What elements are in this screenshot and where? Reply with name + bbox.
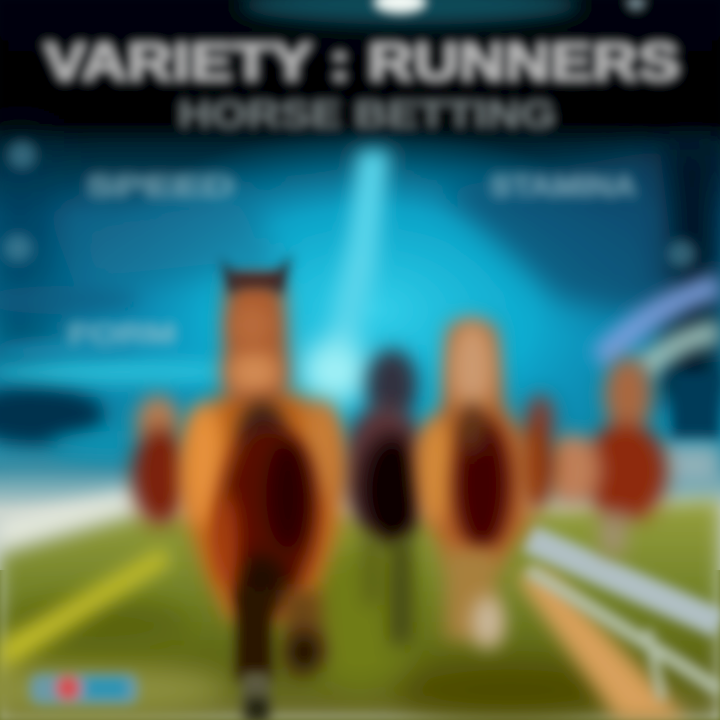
- horizon haze: [0, 490, 140, 548]
- title line 2: HORSE BETTING: [178, 94, 556, 136]
- central light beam: [299, 150, 390, 404]
- horse far left: [132, 395, 188, 525]
- title line 1: VARIETY : RUNNERS: [44, 32, 680, 92]
- label right upper: STAMINA: [490, 170, 636, 203]
- rainbow streak right: [600, 285, 720, 485]
- title: [44, 32, 680, 136]
- main horse chest: [238, 400, 286, 464]
- horse black centre: [341, 349, 429, 645]
- horse centre right: [416, 320, 530, 648]
- label left lower: FORM: [68, 318, 176, 349]
- white fence: [528, 538, 720, 700]
- moon at top of sky: [374, 0, 426, 13]
- main horse legs: [236, 590, 272, 680]
- horse far right small: [546, 357, 667, 555]
- logo badge bottom left: [30, 674, 138, 704]
- yellow track line: [0, 548, 172, 672]
- main horse shoulder highlight left: [184, 403, 224, 527]
- horse main foreground: [181, 254, 343, 720]
- small star top right: [627, 0, 645, 10]
- main horse head: [222, 278, 290, 405]
- main horse body: [181, 385, 343, 620]
- grass track: [0, 500, 720, 720]
- main horse ears: [220, 254, 292, 296]
- main horse muzzle highlight: [228, 350, 280, 394]
- main horse shoulder highlight right: [302, 400, 342, 500]
- faint sky text labels: [68, 170, 636, 349]
- orange track edge: [515, 572, 688, 720]
- label left upper: SPEED: [86, 170, 234, 203]
- horse mid right small: [515, 394, 555, 511]
- faint sky dots: [4, 141, 696, 268]
- base ground colour under blurred edges: [0, 570, 720, 720]
